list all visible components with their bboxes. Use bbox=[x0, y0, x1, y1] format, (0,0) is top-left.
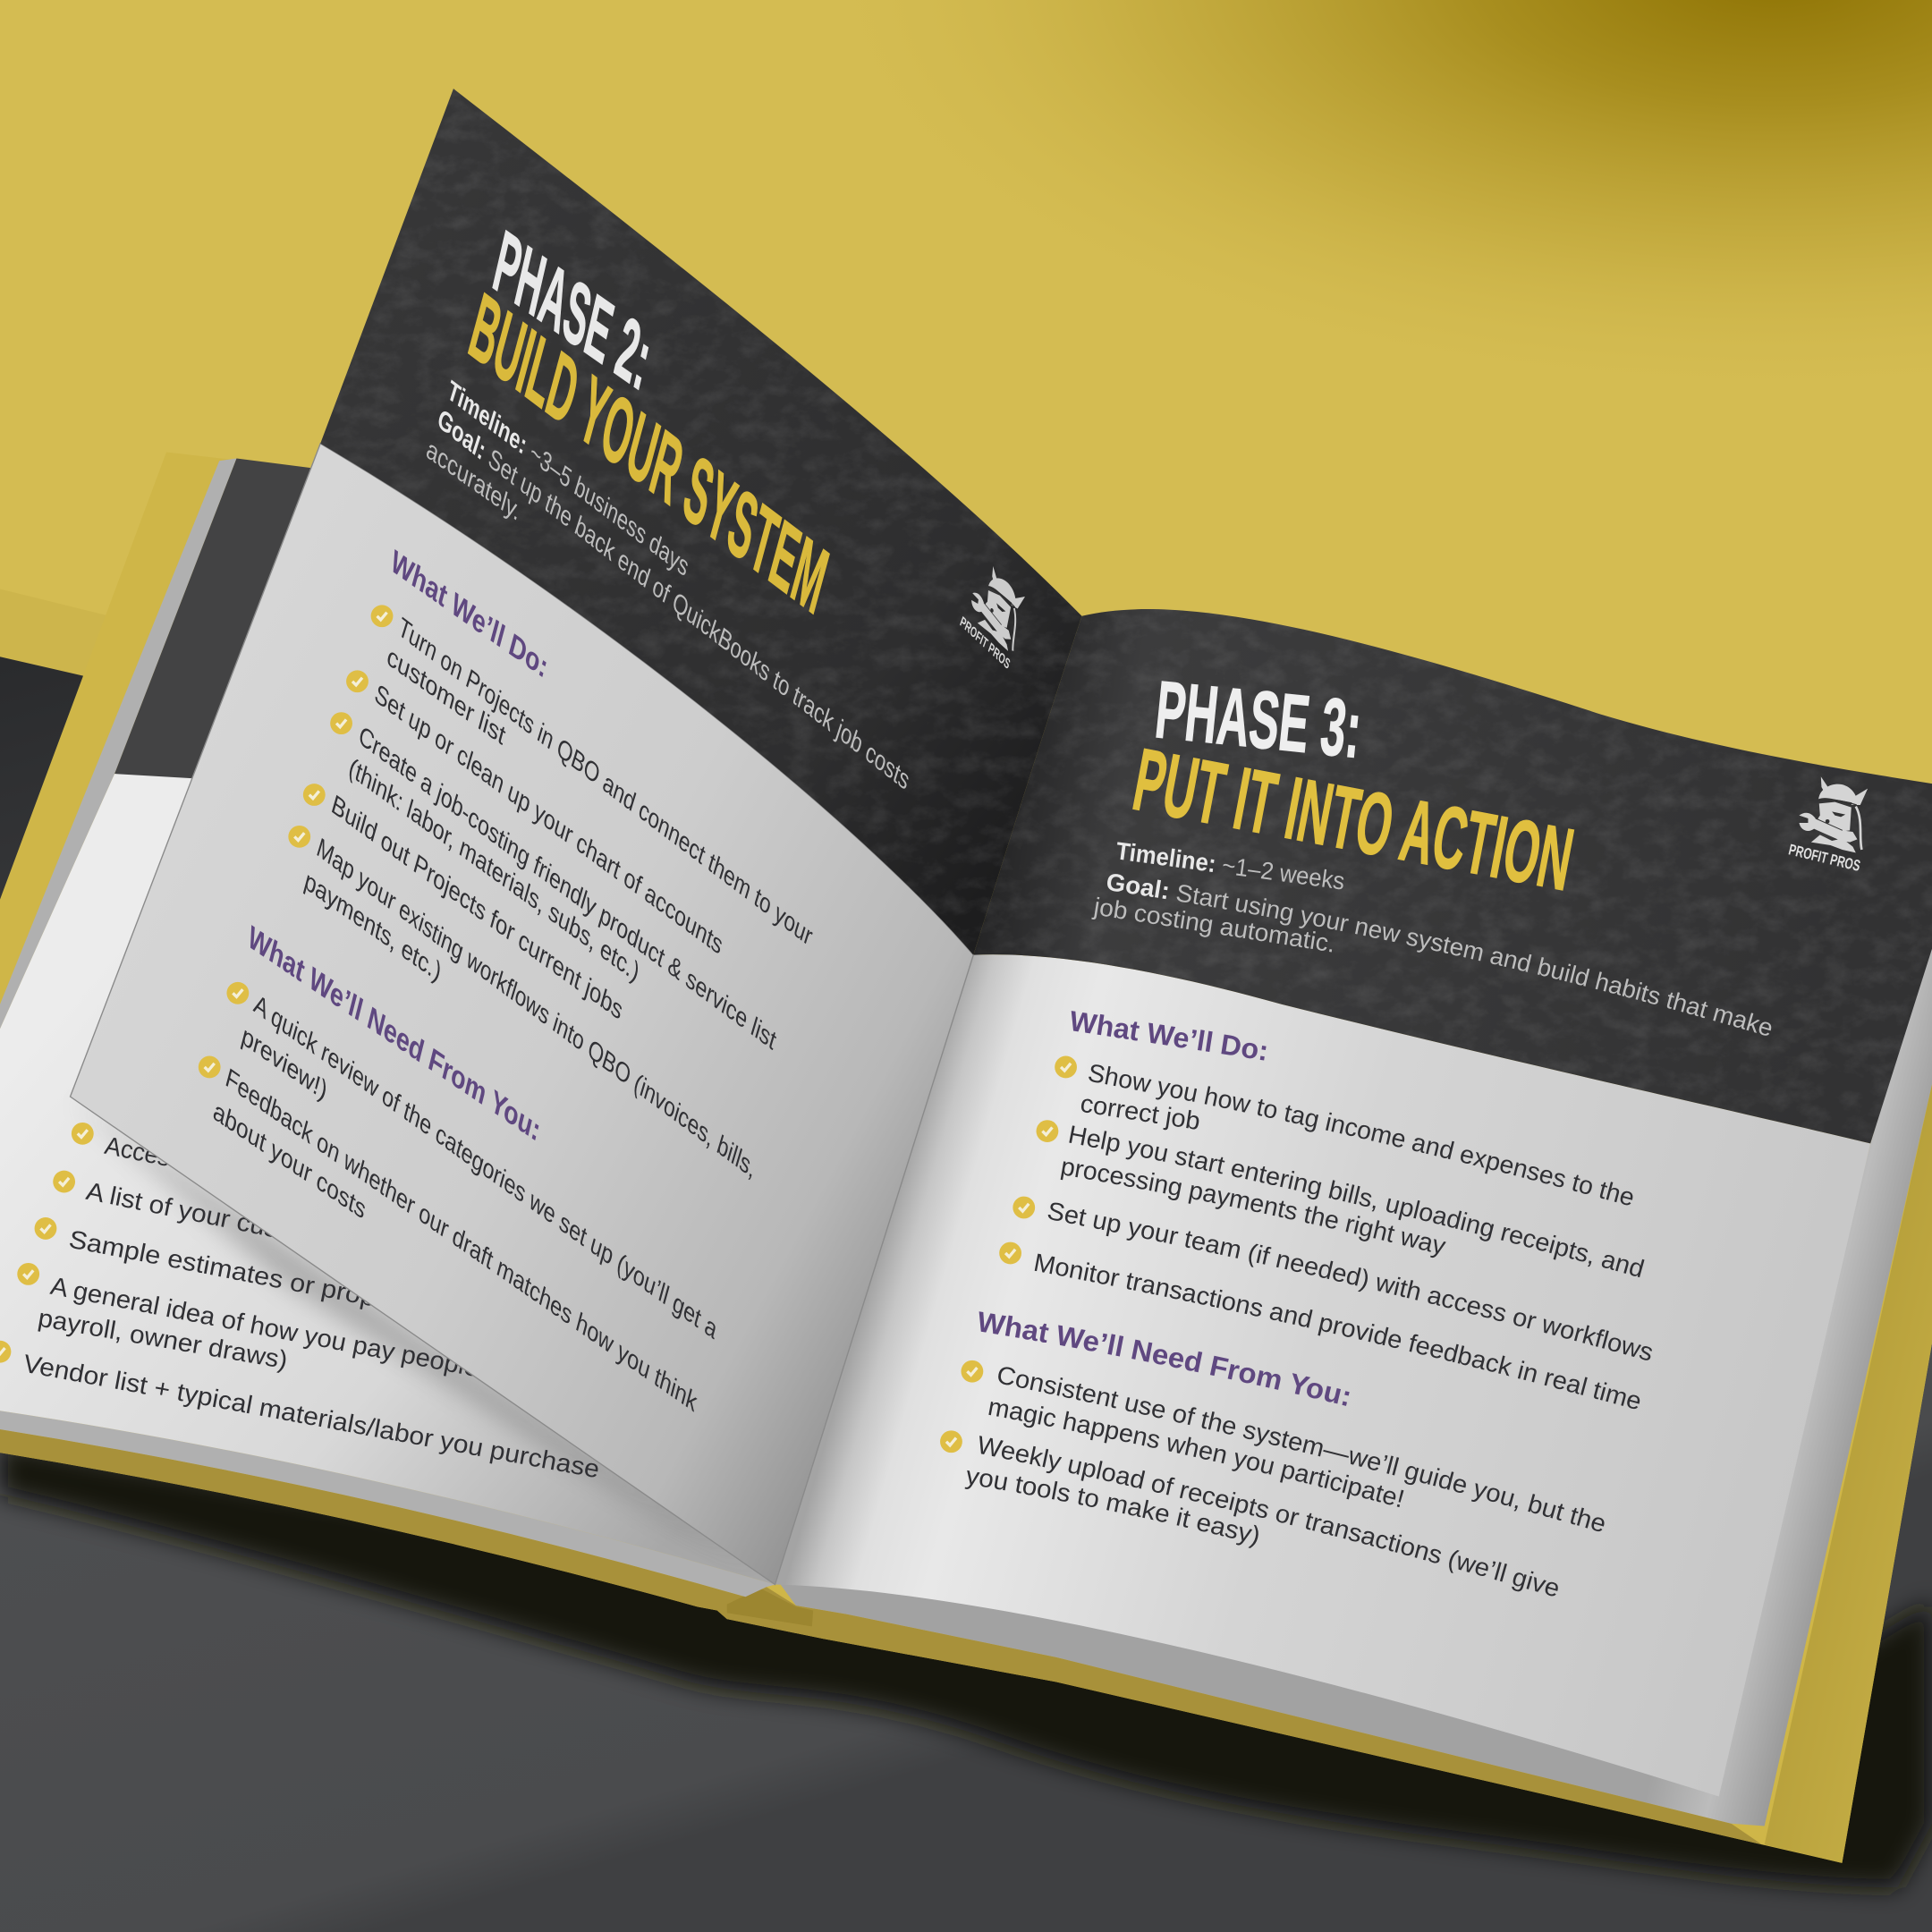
check icon bbox=[999, 1242, 1021, 1264]
header texture bbox=[987, 614, 1932, 1127]
right page body bbox=[775, 954, 1870, 1796]
heading: what we'll need from you: What We’ll Need From You: bbox=[245, 919, 544, 1148]
header texture bbox=[308, 74, 1097, 961]
right page: phase 3 bbox=[775, 609, 1932, 1796]
timeline: Timeline: ~1–2 weeks bbox=[1114, 836, 1346, 895]
list text: Monitor transactions and provide feedback in real time bbox=[1034, 1254, 1640, 1410]
list text: payments, etc.) bbox=[301, 865, 445, 987]
list text: Map your existing workflows into QBO (invoices, bills, bbox=[314, 832, 759, 1184]
list text: you tools to make it easy) bbox=[964, 1470, 1258, 1548]
book cast shadow bbox=[0, 1442, 1932, 1887]
right page stack bbox=[775, 943, 1932, 1826]
list text: processing payments the right way bbox=[1061, 1161, 1446, 1258]
check icon bbox=[288, 826, 310, 848]
logo icon: unicorn with wrench bbox=[1799, 776, 1868, 852]
text line: Sample estimates or proposals bbox=[67, 1224, 441, 1324]
title: phase 3: PHASE 3: bbox=[1151, 665, 1365, 775]
timeline: Timeline: ~3–5 business days bbox=[445, 375, 692, 583]
heading: what we'll do: What We’ll Do: bbox=[387, 543, 552, 685]
check icon bbox=[346, 670, 369, 692]
list text: Turn on Projects in QBO and connect them to your bbox=[395, 611, 816, 952]
list text: A quick review of the categories we set up (you’ll get a bbox=[251, 988, 721, 1345]
dark top-right corner shading bbox=[0, 0, 1932, 862]
logo: profit pros bbox=[956, 552, 1027, 677]
hinge shaded panel bbox=[727, 1589, 813, 1626]
goal line 1: Goal: Set up the back end of QuickBooks to track job costs bbox=[434, 403, 913, 797]
check icon bbox=[1055, 1056, 1077, 1078]
list text: Build out Projects for current jobs bbox=[328, 789, 626, 1026]
goal line 2: accurately. bbox=[423, 434, 524, 528]
list text: Weekly upload of receipts or transactions (we’ll give bbox=[979, 1436, 1558, 1596]
goal line 1: Goal: Start using your new system and build habits that make bbox=[1107, 874, 1771, 1036]
turning page body bbox=[71, 444, 973, 1585]
cover lower edge and spine hinge bbox=[0, 1429, 1762, 1844]
text line: Vendor list + typical materials/labor you purchase bbox=[21, 1349, 602, 1483]
list text: customer list bbox=[385, 640, 509, 750]
right page dark header bbox=[973, 609, 1932, 1143]
list text: Consistent use of the system—we’ll guide you, but the bbox=[998, 1367, 1605, 1531]
list text: preview!) bbox=[239, 1020, 330, 1106]
logo icon: unicorn with wrench bbox=[968, 557, 1027, 656]
check icon bbox=[303, 784, 326, 806]
check icon bbox=[72, 1123, 94, 1145]
dark floor surface bbox=[0, 657, 1932, 1932]
list text: Create a job-costing friendly product & service list bbox=[356, 720, 780, 1055]
turning page dark header bbox=[320, 89, 1081, 955]
left page stack bbox=[0, 458, 775, 1597]
title: build your system: BUILD YOUR SYSTEM bbox=[461, 272, 837, 634]
list text: correct job bbox=[1079, 1089, 1202, 1135]
cover right edge bbox=[1765, 1084, 1932, 1863]
check icon bbox=[961, 1360, 983, 1383]
check icon bbox=[199, 1056, 221, 1078]
check icon bbox=[330, 712, 352, 734]
under page dark header bbox=[114, 458, 333, 789]
check icon bbox=[53, 1171, 75, 1192]
heading: what we'll need from you: What We’ll Need From You: bbox=[979, 1311, 1350, 1406]
list text: Set up your team (if needed) with access or workflows bbox=[1048, 1202, 1652, 1360]
shadow cast by the turning page bbox=[100, 1120, 687, 1526]
hardcover yellow bbox=[0, 453, 1932, 1863]
turning page: phase 2 bbox=[71, 74, 1097, 1585]
check icon bbox=[35, 1217, 56, 1240]
goal line 2: job costing automatic. bbox=[1091, 892, 1337, 958]
text line: A list of your customers bbox=[84, 1176, 361, 1259]
check icon bbox=[0, 1341, 11, 1363]
left under page: phase 1 bbox=[0, 458, 775, 1585]
table lip on the left bbox=[0, 589, 209, 727]
list text: Show you how to tag income and expenses to the bbox=[1089, 1064, 1633, 1206]
check icon bbox=[1037, 1120, 1058, 1142]
list text: about your costs bbox=[210, 1095, 369, 1224]
logo: profit pros bbox=[1787, 776, 1868, 875]
title: phase 2: PHASE 2: bbox=[487, 212, 659, 410]
logo wordmark: PROFIT PROS bbox=[958, 614, 1012, 673]
list text: Set up or clean up your chart of accounts bbox=[372, 678, 726, 961]
list text: Feedback on whether our draft matches how you think bbox=[223, 1062, 700, 1418]
under page body bbox=[0, 774, 775, 1585]
check icon bbox=[226, 982, 249, 1004]
heading: what we'll do: What We’ll Do: bbox=[1067, 1004, 1271, 1067]
text line: payroll, owner draws) bbox=[36, 1303, 290, 1374]
list text: (think: labor, materials, subs, etc.) bbox=[346, 751, 642, 987]
text line: A general idea of how you pay people (W-2, 1099, bbox=[48, 1271, 623, 1410]
list text: Help you start entering bills, uploading receipts, and bbox=[1069, 1125, 1644, 1277]
list text: magic happens when you participate! bbox=[988, 1402, 1404, 1508]
check icon bbox=[17, 1263, 39, 1285]
check icon bbox=[1013, 1197, 1035, 1218]
text line: Access to your QuickBooks bbox=[103, 1131, 398, 1217]
logo wordmark: PROFIT PROS bbox=[1787, 840, 1862, 875]
check icon bbox=[371, 605, 393, 627]
check icon bbox=[940, 1430, 962, 1453]
